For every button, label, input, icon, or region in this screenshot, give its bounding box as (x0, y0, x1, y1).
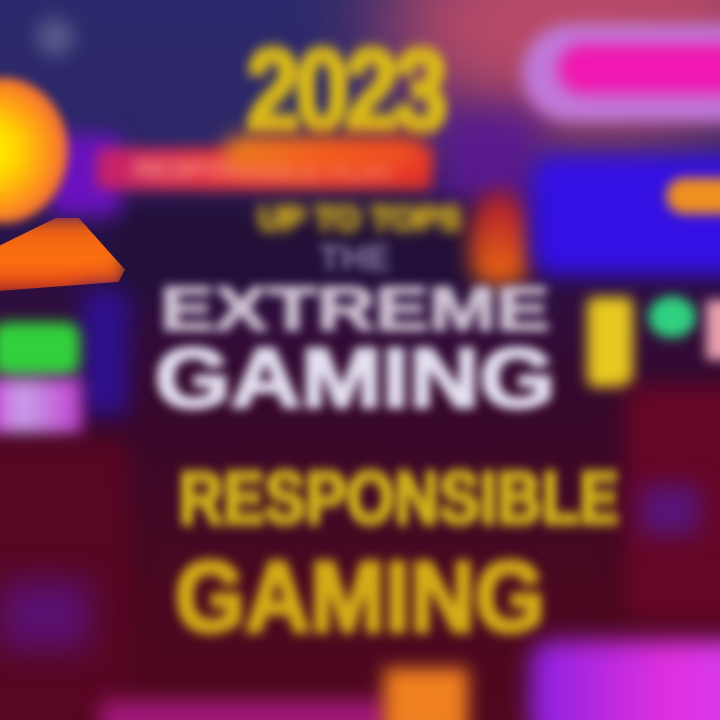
panel: dark navy band (110, 205, 510, 295)
button: pink pill (522, 24, 720, 122)
banner: red pink ribbon (96, 148, 432, 190)
indicator: pink dot (706, 300, 720, 360)
title line: lower: GAMING (155, 331, 555, 425)
panel: right purple glow (640, 485, 700, 535)
banner text: RESPONSIBLE PLAY (134, 154, 394, 184)
panel: right dark red (625, 385, 720, 620)
banner: orange top (225, 136, 425, 168)
title line: small: THE (319, 237, 391, 278)
panel: lower right magenta (530, 640, 720, 720)
icon: orange flame (470, 190, 530, 285)
shape: orange roof (0, 218, 125, 294)
indicator: yellow column (587, 297, 633, 387)
heading: responsible: RESPONSIBLE (179, 457, 620, 539)
background star (36, 18, 74, 56)
panel: violet column (82, 290, 128, 415)
strip: bottom magenta (100, 700, 390, 720)
title line: upper: EXTREME (160, 275, 550, 344)
background glow: top centre purple (440, 110, 540, 220)
button: orange pill (666, 178, 720, 214)
panel: lower left dark red (0, 440, 130, 720)
block: bottom orange (384, 668, 468, 720)
icon: glowing sun (0, 78, 68, 223)
title: white text block (149, 237, 559, 425)
purple glow behind sun (50, 135, 120, 215)
subheading: yellow text: UP TO TOPS (258, 200, 462, 238)
panel: lower left purple glow (0, 580, 90, 650)
button: green pill (0, 322, 80, 376)
heading: year: 2023 (246, 26, 444, 155)
background glow: top right (380, 0, 720, 140)
indicator: green dot (648, 296, 696, 338)
panel: pink block (0, 378, 82, 436)
button inner (558, 44, 720, 94)
panel: blue screen (532, 155, 720, 275)
heading: gaming: GAMING (175, 543, 545, 653)
